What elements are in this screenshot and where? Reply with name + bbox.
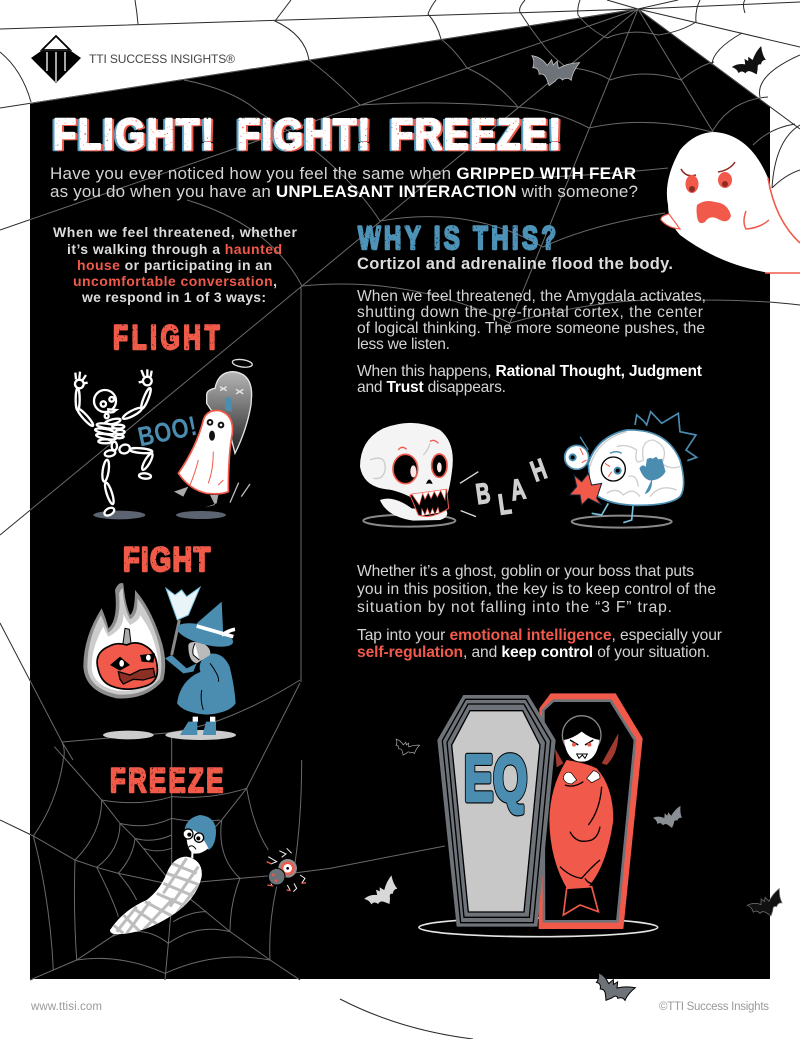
paragraph: rational thought: When this happens, Rational Thought, Judgment bbox=[357, 363, 702, 380]
blah text bbox=[460, 454, 551, 522]
footer: website: www.ttisi.com bbox=[30, 1001, 102, 1013]
paragraph: amygdala bbox=[357, 288, 706, 353]
shadows bbox=[103, 730, 236, 740]
paragraph: emotional intelligence bbox=[357, 627, 722, 661]
flame bbox=[83, 583, 165, 698]
brain bbox=[565, 430, 684, 505]
intro text bbox=[50, 164, 638, 201]
brain illustration bbox=[565, 412, 697, 528]
vampire bbox=[549, 716, 618, 915]
fight illustration bbox=[83, 583, 236, 740]
eq text: EQ bbox=[464, 742, 527, 815]
paragraph: amygdala: When we feel threatened, the Amygdala activates, bbox=[357, 288, 706, 305]
paragraph: 3F trap: situation by not falling into the “3 F” trap. bbox=[357, 599, 672, 616]
title: FLIGHT! bbox=[51, 110, 212, 160]
paragraph: 3F trap: you in this position, the key is to keep control of the bbox=[357, 581, 716, 598]
bat: light bbox=[362, 875, 404, 914]
left intro text: uncomfortable conversation, bbox=[73, 273, 277, 289]
subheading: Cortizol and adrenaline flood the body. bbox=[357, 255, 673, 273]
freeze illustration bbox=[110, 815, 306, 934]
ring bbox=[363, 515, 455, 527]
broom bbox=[166, 587, 200, 655]
title: FLIGHT! bbox=[55, 110, 216, 160]
pumpkin bbox=[97, 628, 157, 689]
spider bbox=[267, 848, 306, 892]
bat: bottom bbox=[588, 969, 635, 1010]
intro text: Have you ever noticed how you feel the same when GRIPPED WITH FEAR bbox=[50, 164, 636, 183]
paragraph: amygdala: of logical thinking. The more someone pushes, the bbox=[357, 320, 705, 337]
brain burst bbox=[635, 412, 697, 461]
title: FREEZE! bbox=[388, 110, 559, 160]
eq text: EQ bbox=[464, 742, 527, 815]
left intro text: When we feel threatened, whether bbox=[53, 224, 298, 240]
paragraph: rational thought bbox=[357, 363, 702, 396]
left intro text bbox=[53, 224, 298, 305]
ring bbox=[572, 516, 672, 528]
left intro text: we respond in 1 of 3 ways: bbox=[81, 289, 266, 305]
blah text: A bbox=[508, 473, 528, 507]
legs bbox=[592, 503, 633, 523]
paragraph: rational thought: and Trust disappears. bbox=[357, 379, 506, 396]
title: FIGHT! bbox=[235, 110, 368, 160]
bat: edge right bbox=[746, 889, 788, 923]
bat: top black bbox=[730, 46, 772, 83]
logo mark bbox=[31, 36, 81, 83]
eq text bbox=[464, 742, 527, 815]
paragraph: 3F trap: Whether it’s a ghost, goblin or your boss that puts bbox=[357, 563, 694, 580]
title: FREEZE! bbox=[392, 110, 563, 160]
heading: why is this: WHY IS THIS? bbox=[358, 220, 556, 256]
logo bbox=[31, 36, 235, 83]
blah text: B bbox=[474, 478, 492, 511]
blah text: L bbox=[496, 488, 513, 522]
white ghost bbox=[174, 411, 250, 507]
footer: copyright: ©TTI Success Insights bbox=[659, 1001, 769, 1013]
logo wordmark: TTI SUCCESS INSIGHTS® bbox=[89, 52, 235, 66]
left intro text: house or participating in an bbox=[77, 257, 272, 273]
paragraph: emotional intelligence: self-regulation, and keep control of your situation. bbox=[357, 644, 710, 661]
skeleton bbox=[75, 369, 154, 517]
big ghost bbox=[661, 132, 800, 273]
intro text: as you do when you have an UNPLEASANT INTERACTION with someone? bbox=[50, 182, 638, 201]
paragraph: amygdala: shutting down the pre-frontal cortex, the center bbox=[357, 304, 703, 321]
bat: top grey bbox=[526, 51, 580, 91]
boo text: BOO! bbox=[135, 412, 199, 453]
bat: outline left bbox=[392, 737, 420, 759]
flight illustration bbox=[75, 358, 253, 519]
witch bbox=[165, 602, 236, 735]
paragraph: emotional intelligence: Tap into your emotional intelligence, especially your bbox=[357, 627, 722, 644]
heading: fight: FIGHT bbox=[123, 540, 210, 579]
paragraph: amygdala: less we listen. bbox=[357, 336, 450, 353]
heading: freeze: FREEZE bbox=[110, 763, 223, 800]
skull illustration bbox=[360, 423, 551, 527]
bat: grey right bbox=[652, 806, 686, 833]
coffin illustration bbox=[419, 693, 658, 937]
title: FIGHT! bbox=[237, 109, 370, 159]
title: FIGHT! bbox=[239, 110, 372, 160]
mummy body bbox=[110, 857, 202, 934]
shadows bbox=[93, 511, 226, 519]
title: FLIGHT! bbox=[53, 109, 214, 159]
mummy head bbox=[183, 815, 216, 858]
red coffin bbox=[539, 693, 643, 929]
ring bbox=[419, 918, 658, 937]
paragraph: 3F trap bbox=[357, 563, 716, 616]
grey coffin bbox=[437, 695, 556, 927]
grey spirit ghost bbox=[207, 358, 253, 453]
title bbox=[51, 109, 563, 160]
left intro text: it’s walking through a haunted bbox=[67, 241, 282, 257]
skull bbox=[360, 423, 453, 521]
title: FREEZE! bbox=[390, 109, 561, 159]
blah text: H bbox=[527, 454, 551, 488]
heading: flight: FLIGHT bbox=[113, 319, 220, 357]
